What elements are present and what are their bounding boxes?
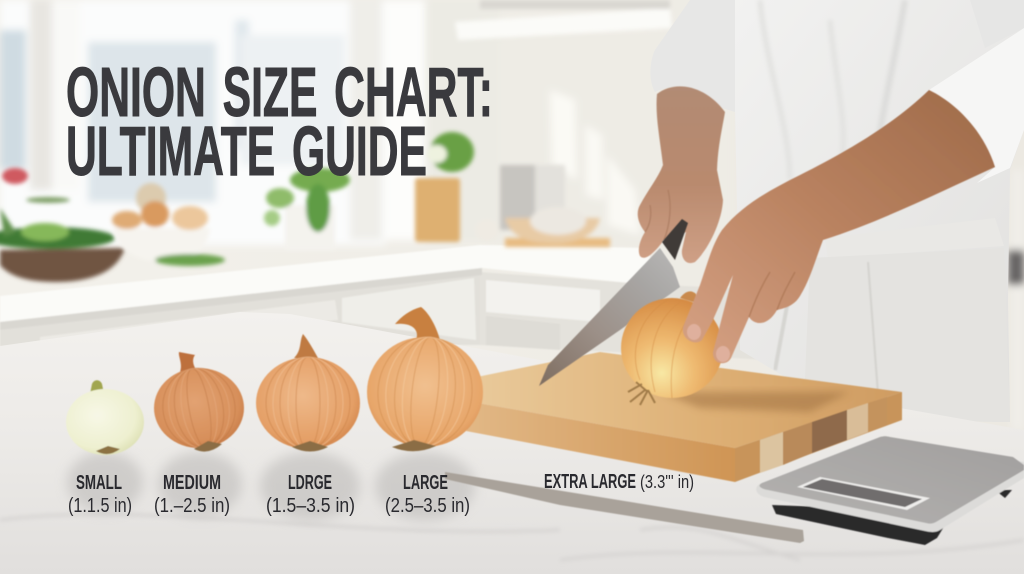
label: small: SMALL bbox=[76, 472, 122, 494]
title bbox=[66, 53, 493, 190]
marble worktop bbox=[0, 312, 1024, 574]
label: large: (2.5–3.5 in) bbox=[385, 495, 470, 517]
wall shelf bbox=[455, 0, 672, 40]
onion: large bbox=[367, 307, 483, 452]
label: extra large: EXTRA LARGE bbox=[544, 471, 636, 493]
label: small bbox=[68, 472, 132, 517]
label: medium: MEDIUM bbox=[163, 472, 221, 494]
cutting board bbox=[466, 352, 902, 482]
onion: small bbox=[66, 380, 144, 455]
label: large: LARGE bbox=[403, 472, 448, 494]
scale rim bbox=[756, 438, 1024, 532]
scale plate bbox=[760, 436, 1024, 524]
blurred white bowl of onions bbox=[112, 183, 225, 266]
apron bbox=[805, 248, 1010, 422]
left forearm and hand bbox=[638, 86, 725, 263]
knife bbox=[539, 219, 688, 386]
chef jacket and apron bbox=[650, 0, 1024, 422]
onion being cut bbox=[621, 291, 723, 405]
right forearm and hand bbox=[683, 90, 995, 363]
blurred flower pot bbox=[415, 132, 474, 242]
steel ruler bbox=[445, 472, 804, 543]
back counter and cabinets bbox=[0, 245, 780, 360]
scale feet bbox=[772, 490, 1012, 545]
jacket body bbox=[690, 0, 1024, 422]
label: large bbox=[385, 472, 470, 517]
label: small: (1.1.5 in) bbox=[68, 495, 132, 517]
waistband bbox=[825, 218, 1004, 258]
kitchen scale bbox=[756, 436, 1024, 545]
fingernails bbox=[687, 324, 701, 340]
knife handle bbox=[662, 219, 688, 260]
label: ldrge bbox=[266, 472, 355, 517]
label: medium: (1.–2.5 in) bbox=[154, 495, 230, 517]
label: extra large: (3.3''' in) bbox=[640, 472, 694, 492]
label: medium bbox=[154, 472, 230, 517]
knife blade bbox=[539, 248, 680, 386]
onion: ldrge bbox=[256, 334, 360, 452]
title: ULTIMATE GUIDE bbox=[66, 112, 427, 190]
blurred jars and bowl bbox=[475, 165, 610, 247]
label: ldrge: LDRGE bbox=[288, 472, 332, 494]
right sleeve bbox=[929, 28, 1024, 183]
label: ldrge: (1.5–3.5 in) bbox=[266, 495, 355, 517]
title: ONION SIZE CHART: bbox=[66, 53, 493, 131]
onion: medium bbox=[154, 352, 244, 454]
scale display bbox=[797, 477, 930, 510]
blurred wooden bowl with greens bbox=[0, 168, 125, 282]
left sleeve bbox=[650, 0, 735, 112]
blurred herb plant bbox=[264, 168, 350, 250]
jacket seam bbox=[878, 0, 905, 150]
onion shadows on marble bbox=[67, 452, 475, 520]
